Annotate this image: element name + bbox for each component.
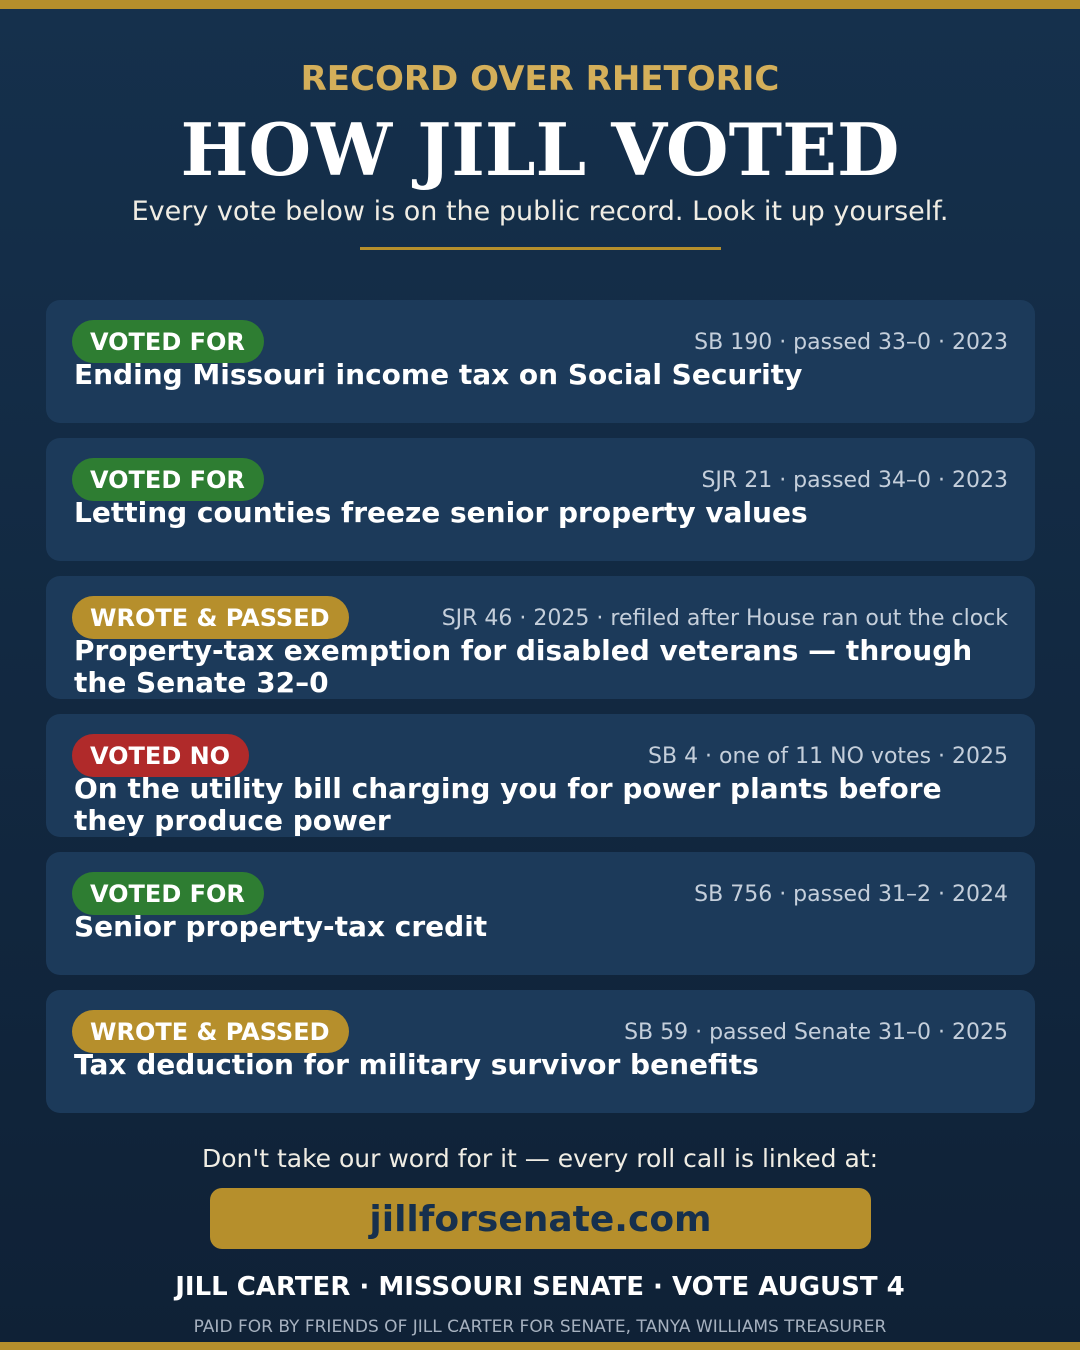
badge: voted for: VOTED FOR bbox=[90, 466, 245, 494]
badge: voted for bbox=[72, 872, 264, 915]
paid-for disclaimer: PAID FOR BY FRIENDS OF JILL CARTER FOR SENATE, TANYA WILLIAMS TREASURER bbox=[194, 1317, 886, 1337]
badge: voted for bbox=[72, 320, 264, 363]
website button: jillforsenate.com bbox=[369, 1199, 712, 1240]
badge: wrote and passed: WROTE & PASSED bbox=[90, 604, 330, 632]
badge: wrote and passed: WROTE & PASSED bbox=[90, 1018, 330, 1046]
bill reference: SB 4 · one of 11 NO votes · 2025 bbox=[648, 744, 1008, 769]
vote description: Letting counties freeze senior property values bbox=[74, 496, 808, 529]
badge: voted no bbox=[72, 734, 249, 777]
panel: vote 5 bbox=[46, 852, 1035, 975]
panel: vote 1 bbox=[46, 300, 1035, 423]
candidate line: JILL CARTER · MISSOURI SENATE · VOTE AUGUST 4 bbox=[175, 1272, 905, 1302]
bill reference: SB 59 · passed Senate 31–0 · 2025 bbox=[624, 1020, 1008, 1045]
badge: voted for: VOTED FOR bbox=[90, 328, 245, 356]
panel: vote 4 bbox=[46, 714, 1035, 837]
panel: vote 6 bbox=[46, 990, 1035, 1113]
panel: vote 2 bbox=[46, 438, 1035, 561]
bottom gold bar bbox=[0, 1342, 1080, 1350]
title: HOW JILL VOTED bbox=[181, 107, 899, 192]
website button bbox=[210, 1188, 871, 1249]
top gold bar bbox=[0, 0, 1080, 9]
badge: voted for: VOTED FOR bbox=[90, 880, 245, 908]
badge: wrote and passed bbox=[72, 596, 349, 639]
call to action text: Don't take our word for it — every roll call is linked at: bbox=[202, 1144, 878, 1173]
vote description: Senior property-tax credit bbox=[74, 910, 487, 943]
gold divider bbox=[360, 247, 721, 250]
bill reference: SB 190 · passed 33–0 · 2023 bbox=[694, 330, 1008, 355]
vote description: Ending Missouri income tax on Social Security bbox=[74, 358, 802, 391]
badge: voted for bbox=[72, 458, 264, 501]
kicker heading: RECORD OVER RHETORIC bbox=[301, 59, 779, 99]
bill reference: SJR 46 · 2025 · refiled after House ran out the clock bbox=[442, 606, 1008, 631]
vote description: Tax deduction for military survivor benefits bbox=[74, 1048, 759, 1081]
badge: wrote and passed bbox=[72, 1010, 349, 1053]
bill reference: SJR 21 · passed 34–0 · 2023 bbox=[701, 468, 1008, 493]
bill reference: SB 756 · passed 31–2 · 2024 bbox=[694, 882, 1008, 907]
vote description: Property-tax exemption for disabled veterans — through the Senate 32–0 bbox=[74, 634, 972, 699]
vote description: On the utility bill charging you for power plants before they produce power bbox=[74, 772, 942, 837]
subtitle: Every vote below is on the public record. Look it up yourself. bbox=[132, 196, 948, 227]
panel: vote 3 bbox=[46, 576, 1035, 699]
badge: voted no: VOTED NO bbox=[90, 742, 230, 770]
